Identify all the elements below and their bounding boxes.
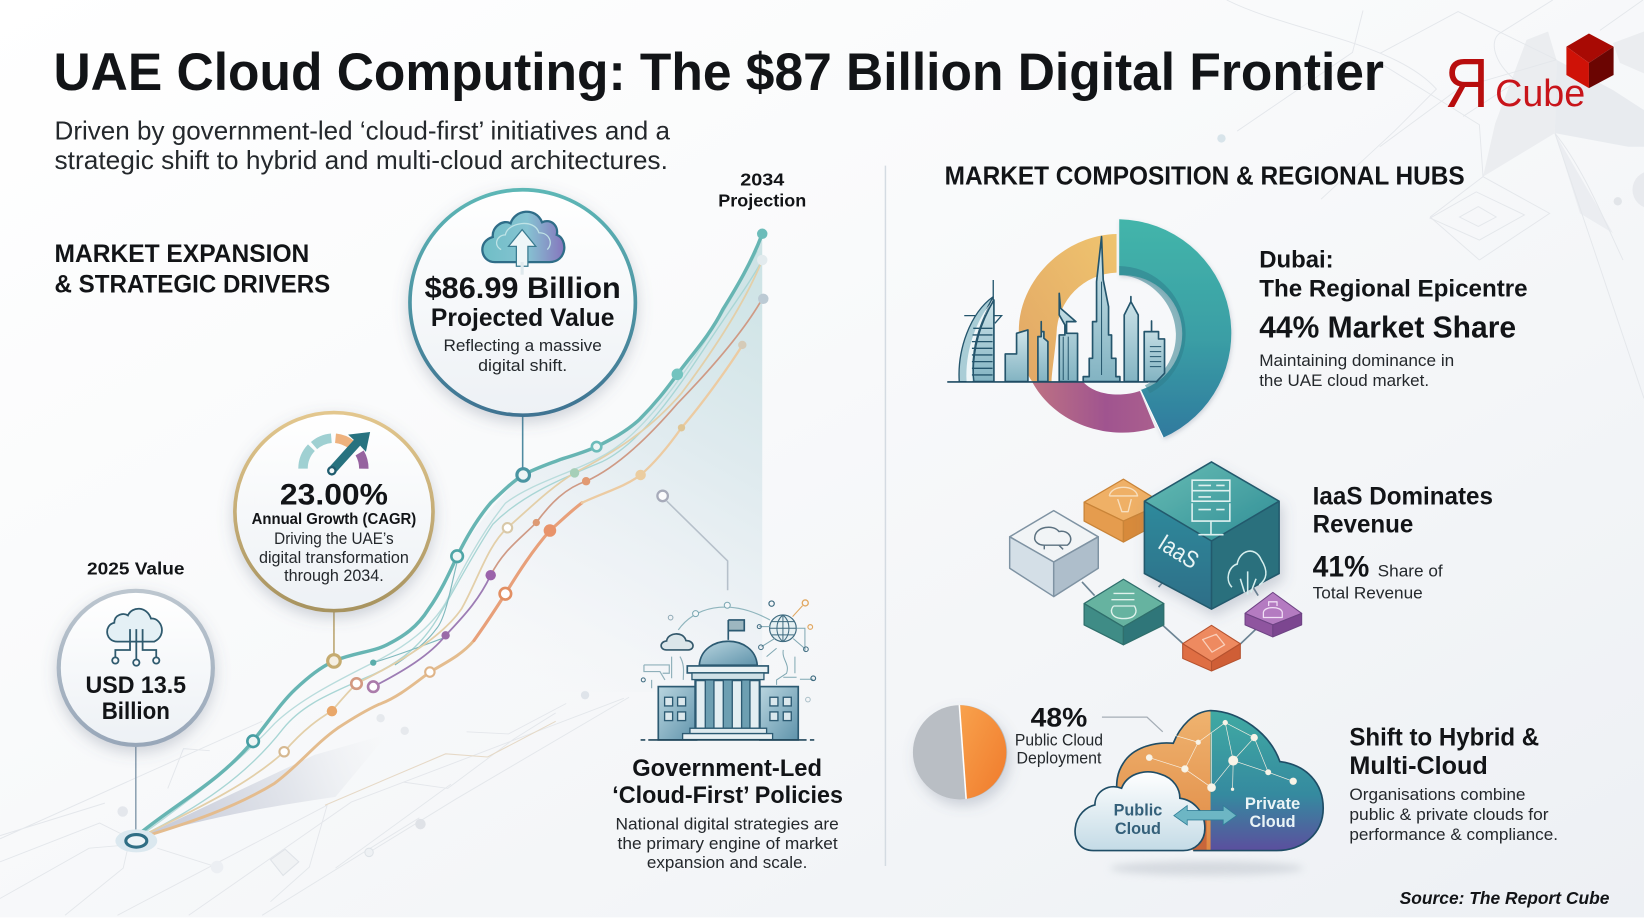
network — [1146, 720, 1297, 792]
label: 2034 projection: 2034 — [740, 170, 784, 190]
icon: hybrid cloud: Private — [1245, 795, 1300, 813]
callout: CAGR — [235, 413, 433, 611]
callout: projected value — [410, 190, 635, 415]
decorative geometric shapes top right — [1217, 0, 1644, 398]
logo: RCube: Cube — [1495, 72, 1585, 114]
callout: CAGR: 23.00% — [280, 478, 388, 511]
cube: white — [1010, 511, 1098, 597]
source: Source: The Report Cube — [1400, 888, 1609, 908]
skyline — [947, 237, 1165, 382]
chart: growth area fill — [419, 234, 762, 692]
heading: market expansion: MARKET EXPANSION — [55, 240, 309, 268]
icon: hybrid cloud — [1075, 711, 1323, 876]
icon: IaaS cube cluster — [1010, 462, 1302, 671]
chart: data nodes — [247, 229, 769, 756]
label: 2034 projection: Projection — [718, 191, 806, 211]
text: government-led policies: National digital strategies are — [615, 814, 839, 833]
icon: government building — [641, 600, 816, 740]
text: IaaS — [1313, 482, 1493, 603]
cloud: public — [1075, 772, 1205, 851]
donut segment: purple — [1032, 382, 1155, 433]
text: hybrid multi-cloud: performance & compliance. — [1349, 825, 1558, 844]
callout: 2025 value: USD 13.5 — [85, 672, 186, 699]
text: Dubai: Maintaining dominance in — [1259, 351, 1454, 370]
text: public cloud deployment: 48% — [1031, 702, 1087, 733]
text: hybrid multi-cloud: public & private clouds for — [1349, 805, 1549, 824]
callout: projected value: $86.99 Billion — [425, 272, 621, 305]
text: public cloud deployment: Deployment — [1016, 749, 1102, 767]
cube: green — [1084, 579, 1164, 645]
donut segment: orange — [1019, 234, 1117, 382]
callout: projected value: digital shift. — [478, 356, 567, 375]
icon: connected cloud — [107, 609, 162, 666]
label: 2034 projection — [718, 170, 806, 211]
callout: CAGR: through 2034. — [284, 567, 384, 585]
text: IaaS: 41% — [1313, 551, 1369, 584]
cube: purple — [1245, 592, 1302, 637]
heading: market composition: MARKET COMPOSITION & REGIONAL HUBS — [945, 161, 1465, 191]
node: CAGR anchor — [328, 655, 340, 667]
chart: public cloud pie — [913, 705, 1007, 799]
callout: CAGR: digital transformation — [259, 549, 409, 567]
title: UAE Cloud Computing: The $87 Billion Digital Frontier — [53, 44, 1384, 102]
callout: projected value: Projected Value — [431, 304, 614, 332]
callout: projected value: Reflecting a massive — [444, 336, 602, 355]
cloud: orange half — [1117, 711, 1211, 851]
text: government-led policies: ‘Cloud-First’ Policies — [612, 782, 843, 809]
donut segment: teal — [1119, 219, 1231, 438]
connector: CAGR stem — [333, 609, 335, 655]
text: hybrid multi-cloud — [1349, 723, 1558, 844]
chart: wedge shadow at origin — [142, 734, 388, 837]
icon: cloud upload — [482, 212, 564, 275]
subtitle — [55, 115, 670, 175]
text: hybrid multi-cloud: Shift to Hybrid & — [1349, 723, 1539, 751]
cube: IaaS main — [1144, 462, 1279, 609]
heading: market expansion — [55, 240, 330, 299]
text: Dubai — [1259, 246, 1528, 390]
text: IaaS: Share of — [1378, 562, 1443, 581]
subtitle: strategic shift to hybrid and multi-cloud architectures. — [55, 145, 668, 175]
label: 2025 value: 2025 Value — [87, 559, 185, 579]
circuit background lines bottom left — [0, 691, 629, 915]
icon: hybrid cloud: Public — [1114, 802, 1162, 820]
icon: gauge — [303, 432, 370, 474]
callout: 2025 value — [59, 591, 213, 745]
subtitle: Driven by government-led ‘cloud-first’ initiatives and a — [55, 115, 670, 145]
connector: policy callout — [657, 491, 728, 590]
cube: orange — [1084, 479, 1163, 542]
logo: RCube — [1445, 34, 1614, 122]
arrow: double-headed — [1174, 806, 1237, 825]
callout: 2025 value: Billion — [102, 698, 170, 725]
text: hybrid multi-cloud: Multi-Cloud — [1349, 752, 1488, 780]
cube: IaaS main: IaaS — [1154, 529, 1204, 574]
divider — [884, 166, 886, 866]
text: public cloud deployment — [1015, 702, 1103, 767]
node: chart origin — [115, 829, 157, 852]
text: government-led policies: expansion and scale. — [647, 853, 807, 872]
connector: 2034 callout stem — [522, 414, 524, 469]
text: IaaS: IaaS Dominates — [1313, 482, 1493, 510]
text: hybrid multi-cloud: Organisations combine — [1349, 785, 1526, 804]
icon: hybrid cloud: Cloud — [1250, 813, 1296, 831]
callout: CAGR: Driving the UAE’s — [274, 530, 394, 548]
text: Dubai: The Regional Epicentre — [1259, 276, 1528, 303]
text: government-led policies: Government-Led — [632, 755, 822, 782]
text: Dubai: Dubai: — [1259, 246, 1334, 273]
chart: donut with Dubai skyline — [947, 219, 1231, 438]
text: Dubai: 44% Market Share — [1259, 311, 1516, 345]
cloud: private half — [1193, 711, 1323, 851]
text: government-led policies — [612, 755, 843, 872]
text: Dubai: the UAE cloud market. — [1259, 371, 1429, 390]
cube: red — [1183, 625, 1240, 671]
connector: 2025 stem — [135, 744, 137, 835]
text: government-led policies: the primary engine of market — [618, 834, 838, 853]
connector: pie label to cloud — [1102, 717, 1163, 732]
text: IaaS: Revenue — [1313, 511, 1413, 539]
text: public cloud deployment: Public Cloud — [1015, 731, 1103, 749]
callout: CAGR: Annual Growth (CAGR) — [252, 511, 416, 528]
text: IaaS: Total Revenue — [1313, 584, 1423, 603]
icon: hybrid cloud: Cloud — [1115, 820, 1161, 838]
chart: growth curves — [138, 234, 762, 838]
logo: RCube: Я — [1445, 44, 1489, 122]
heading: market expansion: & STRATEGIC DRIVERS — [55, 271, 330, 299]
